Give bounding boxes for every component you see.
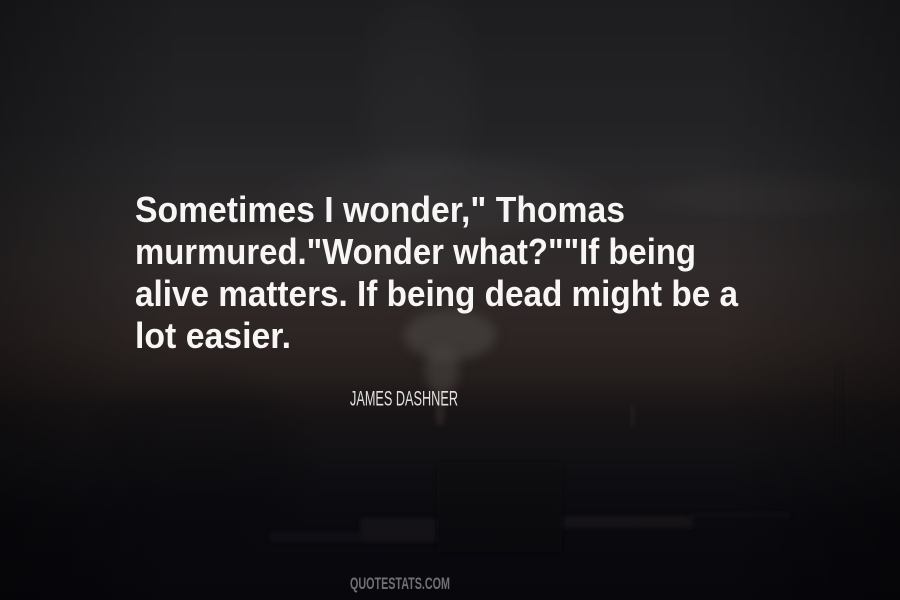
quote text xyxy=(135,189,739,356)
quote line 4: lot easier. xyxy=(135,315,291,356)
author name: JAMES DASHNER xyxy=(350,386,458,410)
dark treeline and buildings xyxy=(70,355,842,575)
quote line 2: murmured."Wonder what?""If being xyxy=(135,231,696,272)
smoke plume xyxy=(404,310,496,426)
site watermark: QUOTESTATS.COM xyxy=(350,574,450,593)
quote line 1: Sometimes I wonder," Thomas xyxy=(135,189,625,230)
quote line 3: alive matters. If being dead might be a xyxy=(135,273,739,314)
